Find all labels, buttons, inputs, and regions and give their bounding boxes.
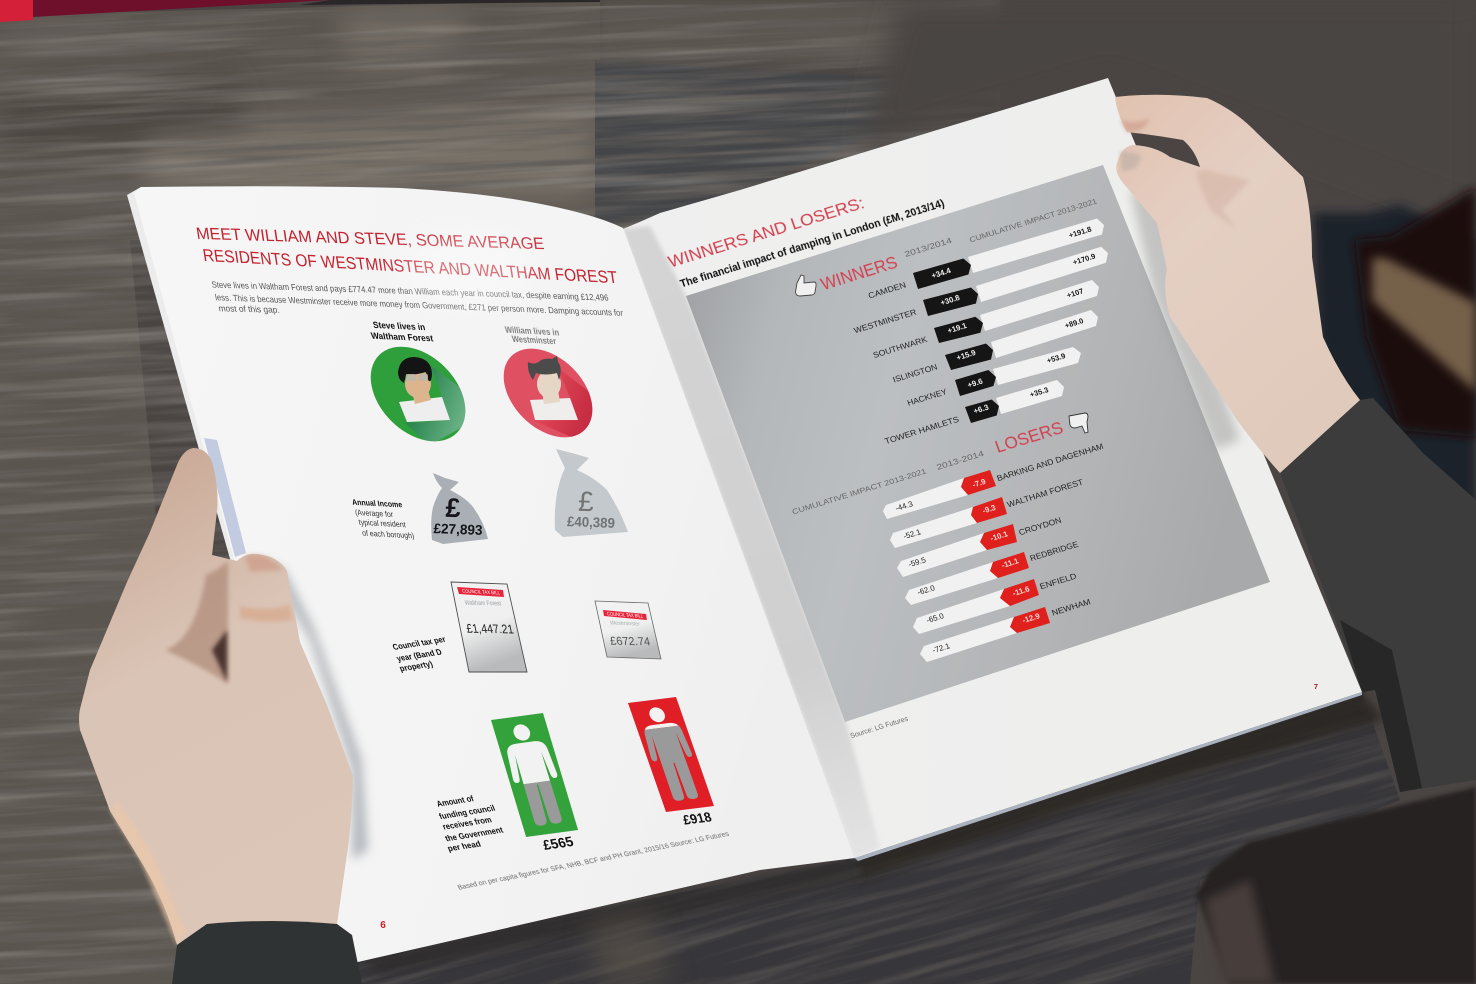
label: funding per head — [435, 793, 505, 853]
open booklet — [127, 78, 1362, 965]
finger fold shading — [1196, 170, 1250, 230]
icon: council tax bill Waltham Forest: £1,447.21 — [465, 622, 515, 636]
label: annual income: (Average for — [354, 508, 394, 519]
chart: losers bars: -11.1 — [1000, 556, 1020, 570]
hand: left hand holding booklet — [79, 448, 353, 945]
chart: losers bars: -44.3 — [894, 499, 914, 513]
hand shadows on pages — [262, 190, 1240, 860]
value: £565: £565 — [541, 833, 576, 853]
icon: council tax bill Waltham Forest — [451, 582, 527, 672]
chart: losers bars: NEWHAM — [1051, 597, 1092, 618]
heading: WINNERS AND LOSERS: — [666, 193, 867, 271]
chart: losers bars: -52.1 — [902, 527, 922, 541]
right page bottom edge — [855, 692, 1362, 861]
icon: Steve avatar in green circle — [370, 346, 466, 442]
page number 7: 7 — [1314, 682, 1318, 691]
icon: money bag Steve: £27,893 — [433, 520, 483, 538]
icon: council tax bill Westminster — [595, 601, 661, 659]
icon: money bag William — [555, 449, 628, 537]
label: annual income: Annual Income — [351, 498, 403, 509]
icon: council tax bill Westminster: Westminster — [610, 621, 641, 628]
intro text: less. This is because Westminster receive more money from Government, £271 per person more. Damping accounts for — [214, 292, 624, 318]
pictogram: William funding — [628, 697, 714, 812]
label: Steve: Steve lives in — [372, 320, 426, 332]
column header: cumulative winners: CUMULATIVE IMPACT 2013-2021 — [968, 197, 1098, 244]
grey chart panel — [686, 165, 1270, 722]
chart: losers bars: CROYDON — [1018, 516, 1063, 537]
hand: right hand holding booklet — [1115, 95, 1360, 473]
chart: winners bars: +170.9 — [1072, 252, 1097, 267]
label: annual income — [351, 498, 415, 540]
panel: right page Winners and Losers — [666, 165, 1318, 740]
label: annual income: typical resident — [358, 518, 407, 529]
chart: losers bars: -72.1 — [931, 641, 951, 655]
footnote: Based on per capita figures for SFA, NHB, BCF and PH Grant, 2015/16 Source: LG Futures — [456, 829, 731, 892]
chart: winners bars: +89.0 — [1064, 316, 1085, 330]
label: funding per head: receives from — [441, 814, 493, 832]
label: council tax: property) — [398, 659, 434, 673]
chart: losers bars: -11.6 — [1011, 584, 1031, 598]
icon: thumbs down — [1069, 413, 1088, 433]
icon: council tax bill Westminster: COUNCIL TAX BILL — [607, 611, 644, 620]
chart: losers bars: REDBRIDGE — [1029, 540, 1080, 563]
losers title: LOSERS — [992, 417, 1066, 457]
heading — [195, 224, 619, 287]
column header: cumulative losers: CUMULATIVE IMPACT 2013-2021 — [791, 467, 928, 516]
chart: winners bars: +19.1 — [946, 321, 969, 335]
chart: winners bars: WESTMINSTER — [853, 308, 918, 335]
icon: money bag William: £ — [578, 486, 595, 517]
label: council tax — [391, 634, 448, 673]
icon: money bag Steve: £ — [445, 493, 461, 523]
label: William: William lives in — [504, 325, 560, 337]
chart: winners bars: +191.8 — [1068, 225, 1093, 240]
chart: winners bars: +34.4 — [930, 266, 953, 280]
chart: losers bars: -10.1 — [989, 529, 1010, 543]
icon: William avatar in red circle — [504, 348, 592, 438]
source note: Source: LG Futures — [849, 715, 910, 740]
chart: winners bars: HACKNEY — [906, 387, 949, 408]
winners title: WINNERS — [818, 252, 900, 294]
finger gap shading — [165, 561, 228, 684]
label: funding per head: the Government — [443, 825, 505, 843]
page number 6: 6 — [380, 920, 386, 931]
icon: money bag Steve — [431, 473, 488, 544]
chart: winners bars: +30.8 — [939, 293, 962, 307]
chart: losers bars: -65.0 — [925, 611, 946, 625]
chart: losers bars — [883, 442, 1105, 662]
losers header — [992, 413, 1088, 457]
icon: council tax bill Westminster: £672.74 — [609, 635, 652, 648]
label: council tax: year (Band D — [395, 647, 443, 663]
chart: losers bars: -62.0 — [916, 583, 937, 597]
label: Steve — [370, 320, 434, 343]
jacket sleeve, left arm — [172, 921, 362, 984]
chart: losers bars: BARKING AND DAGENHAM — [996, 442, 1105, 483]
chart: losers bars: -59.5 — [907, 555, 927, 569]
label: council tax: Council tax per — [391, 634, 448, 652]
panel: left page Meet William and Steve — [195, 224, 731, 931]
chart: winners bars: +107 — [1066, 286, 1085, 300]
left page blue edge strip — [204, 438, 246, 557]
chart: losers bars: -12.9 — [1021, 611, 1042, 625]
chart: winners bars: TOWER HAMLETS — [884, 415, 961, 446]
left page — [134, 186, 855, 965]
grey gutter strip beside spine — [622, 226, 880, 858]
icon: money bag William: £40,389 — [567, 513, 615, 531]
intro text: most of this gap. — [218, 303, 280, 315]
chart: winners bars: SOUTHWARK — [872, 335, 929, 360]
label: funding per head: funding council — [437, 803, 497, 821]
label: funding per head: Amount of — [435, 793, 475, 809]
icon: thumbs up — [796, 275, 816, 296]
jacket sleeve, right arm — [1280, 398, 1476, 792]
chart: winners bars: +53.9 — [1046, 351, 1067, 365]
value: £918: £918 — [681, 810, 714, 827]
winners header — [796, 252, 900, 296]
label: funding per head: per head — [446, 839, 482, 853]
column header: 2013/2014 winners: 2013/2014 — [903, 236, 954, 259]
chart: winners bars: +9.6 — [966, 376, 985, 390]
chart: losers bars: WALTHAM FOREST — [1006, 478, 1084, 509]
label: William — [504, 325, 560, 346]
icon: council tax bill Waltham Forest: Waltham Forest — [464, 600, 502, 607]
label: annual income: of each borough) — [361, 529, 415, 540]
chart: losers bars: ENFIELD — [1039, 572, 1078, 591]
column header: 2013-2014 losers: 2013-2014 — [935, 449, 986, 472]
icon: council tax bill Waltham Forest: COUNCIL TAX BILL — [462, 589, 501, 597]
chart: winners bars — [853, 218, 1108, 446]
label: Steve: Waltham Forest — [370, 331, 434, 343]
glare highlight — [400, 230, 540, 310]
chart: losers bars: -9.3 — [981, 503, 998, 515]
page stack behind — [127, 187, 360, 965]
pictogram: Steve funding — [491, 713, 578, 837]
heading: MEET WILLIAM AND STEVE, SOME AVERAGE — [195, 224, 545, 253]
right page — [623, 78, 1362, 858]
chart: winners bars: +15.9 — [955, 348, 978, 362]
intro text — [211, 279, 624, 318]
blurred background person: dark jacket and object — [1196, 187, 1476, 984]
chart: winners bars: ISLINGTON — [892, 362, 939, 384]
heading: RESIDENTS OF WESTMINSTER AND WALTHAM FOREST — [201, 245, 619, 287]
chart: losers bars: -7.9 — [971, 477, 988, 489]
chart: winners bars: +35.3 — [1029, 385, 1050, 399]
chart: winners bars: CAMDEN — [867, 280, 907, 300]
intro text: Steve lives in Waltham Forest and pays £774.47 more than William each year in council tax, despite earning £12,496 — [211, 279, 609, 303]
chart: winners bars: +6.3 — [972, 402, 991, 416]
subtitle: The financial impact of damping in London (£M, 2013/14) — [679, 197, 946, 290]
label: William: Westminster — [511, 334, 557, 346]
